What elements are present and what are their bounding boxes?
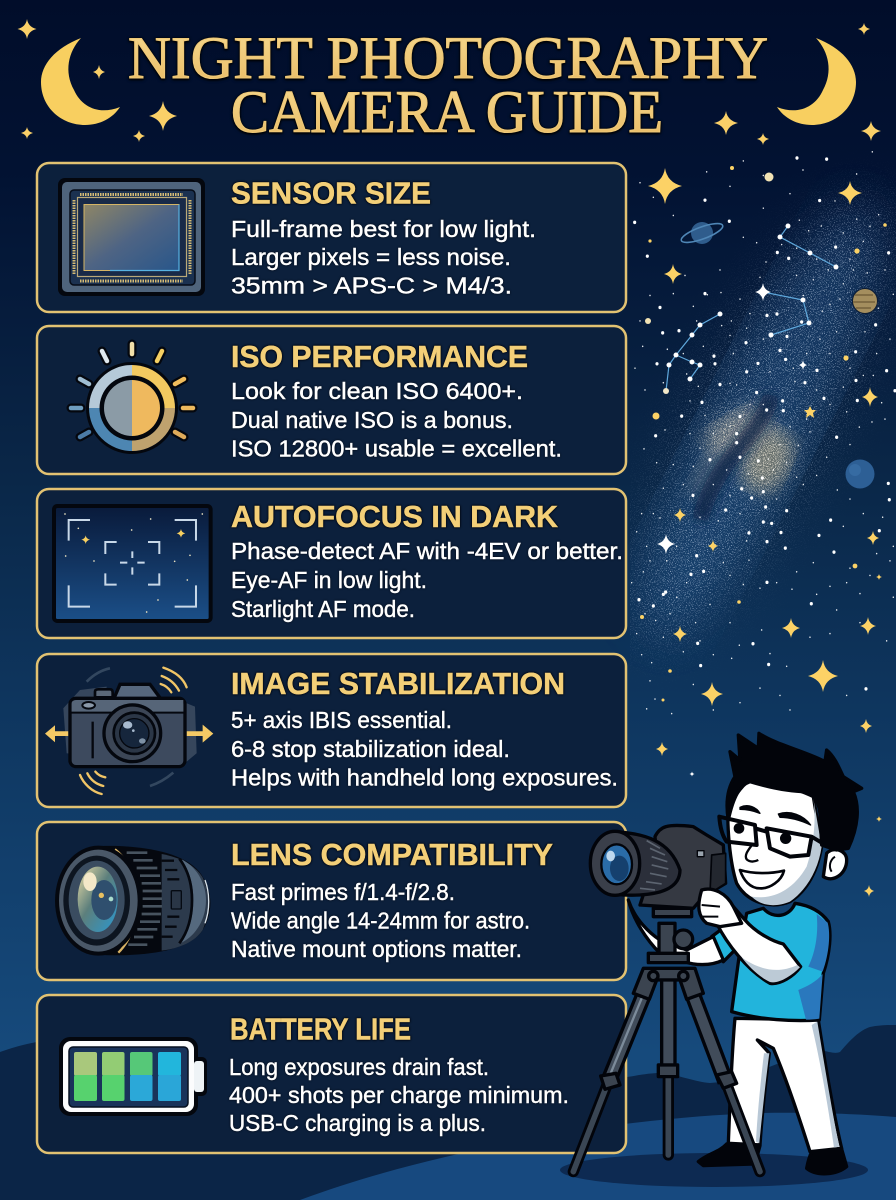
panel: image stabilization (37, 654, 626, 807)
crescent moon right (777, 38, 856, 125)
icon: autofocus viewfinder (54, 506, 211, 621)
panel: lens compatibility (37, 822, 626, 980)
text block: 6-8 stop stabilization ideal. (231, 736, 510, 762)
hair (727, 733, 862, 850)
text block (231, 707, 618, 790)
crescent moon left (41, 38, 120, 125)
star field (632, 152, 895, 714)
text block: Helps with handheld long exposures. (231, 764, 618, 790)
text block: 35mm > APS-C > M4/3. (231, 272, 512, 298)
heading: LENS COMPATIBILITY (231, 838, 553, 872)
icon: ISO dial (71, 344, 193, 454)
text block: 5+ axis IBIS essential. (231, 707, 452, 733)
heading: AUTOFOCUS IN DARK (231, 500, 558, 534)
text block: ISO 12800+ usable = excellent. (231, 436, 562, 462)
panel: autofocus in dark (37, 489, 626, 638)
text block: Starlight AF mode. (231, 596, 415, 622)
photographer with tripod and camera (573, 733, 862, 1174)
t-shirt (712, 903, 830, 1021)
text block: Wide angle 14-24mm for astro. (231, 908, 530, 934)
supporting arm (628, 900, 723, 965)
heading: SENSOR SIZE (231, 176, 431, 210)
text block: Full-frame best for low light. (231, 216, 536, 242)
constellations (663, 226, 836, 394)
text block: Dual native ISO is a bonus. (231, 407, 513, 433)
text block (231, 216, 536, 298)
camera with lens (590, 825, 726, 908)
white stars (657, 283, 807, 776)
head (728, 781, 847, 905)
tripod (573, 908, 760, 1172)
heading: ISO PERFORMANCE (231, 340, 528, 374)
icon: camera lens (55, 846, 210, 956)
ground shadow (560, 1153, 868, 1187)
text block (229, 1054, 569, 1136)
title: CAMERA GUIDE (231, 79, 663, 145)
text block (231, 538, 623, 622)
text block: Look for clean ISO 6400+. (231, 378, 523, 404)
milky way galaxy (630, 169, 896, 670)
heading: IMAGE STABILIZATION (231, 667, 565, 701)
planets (679, 172, 878, 488)
text block: Eye-AF in low light. (231, 567, 427, 593)
icon: image sensor (58, 178, 205, 296)
title (128, 25, 768, 145)
icon: battery (59, 1037, 207, 1116)
foreground hill (300, 1113, 896, 1200)
trousers (728, 1018, 842, 1152)
text block: Long exposures drain fast. (229, 1054, 489, 1080)
shoes (698, 1144, 847, 1174)
distant hills (0, 1025, 896, 1200)
title: NIGHT PHOTOGRAPHY (128, 25, 768, 91)
text block: Native mount options matter. (231, 936, 522, 962)
gripping hand and forearm (699, 889, 801, 984)
text block: Phase-detect AF with -4EV or better. (231, 538, 623, 564)
gold stars and dots (640, 166, 887, 897)
icon: stabilized camera (45, 668, 213, 794)
text block: Larger pixels = less noise. (231, 244, 511, 270)
panel: ISO performance (37, 326, 626, 474)
text block (231, 879, 530, 962)
text block: Fast primes f/1.4-f/2.8. (231, 879, 455, 905)
panel: battery life (37, 995, 626, 1153)
heading: BATTERY LIFE (230, 1012, 411, 1046)
text block: USB-C charging is a plus. (229, 1110, 486, 1136)
face: glasses, eyes, mouth (719, 806, 835, 888)
panel: sensor size (37, 163, 626, 312)
header sparkles (18, 19, 881, 145)
text block: 400+ shots per charge minimum. (229, 1082, 569, 1108)
text block (231, 378, 562, 462)
